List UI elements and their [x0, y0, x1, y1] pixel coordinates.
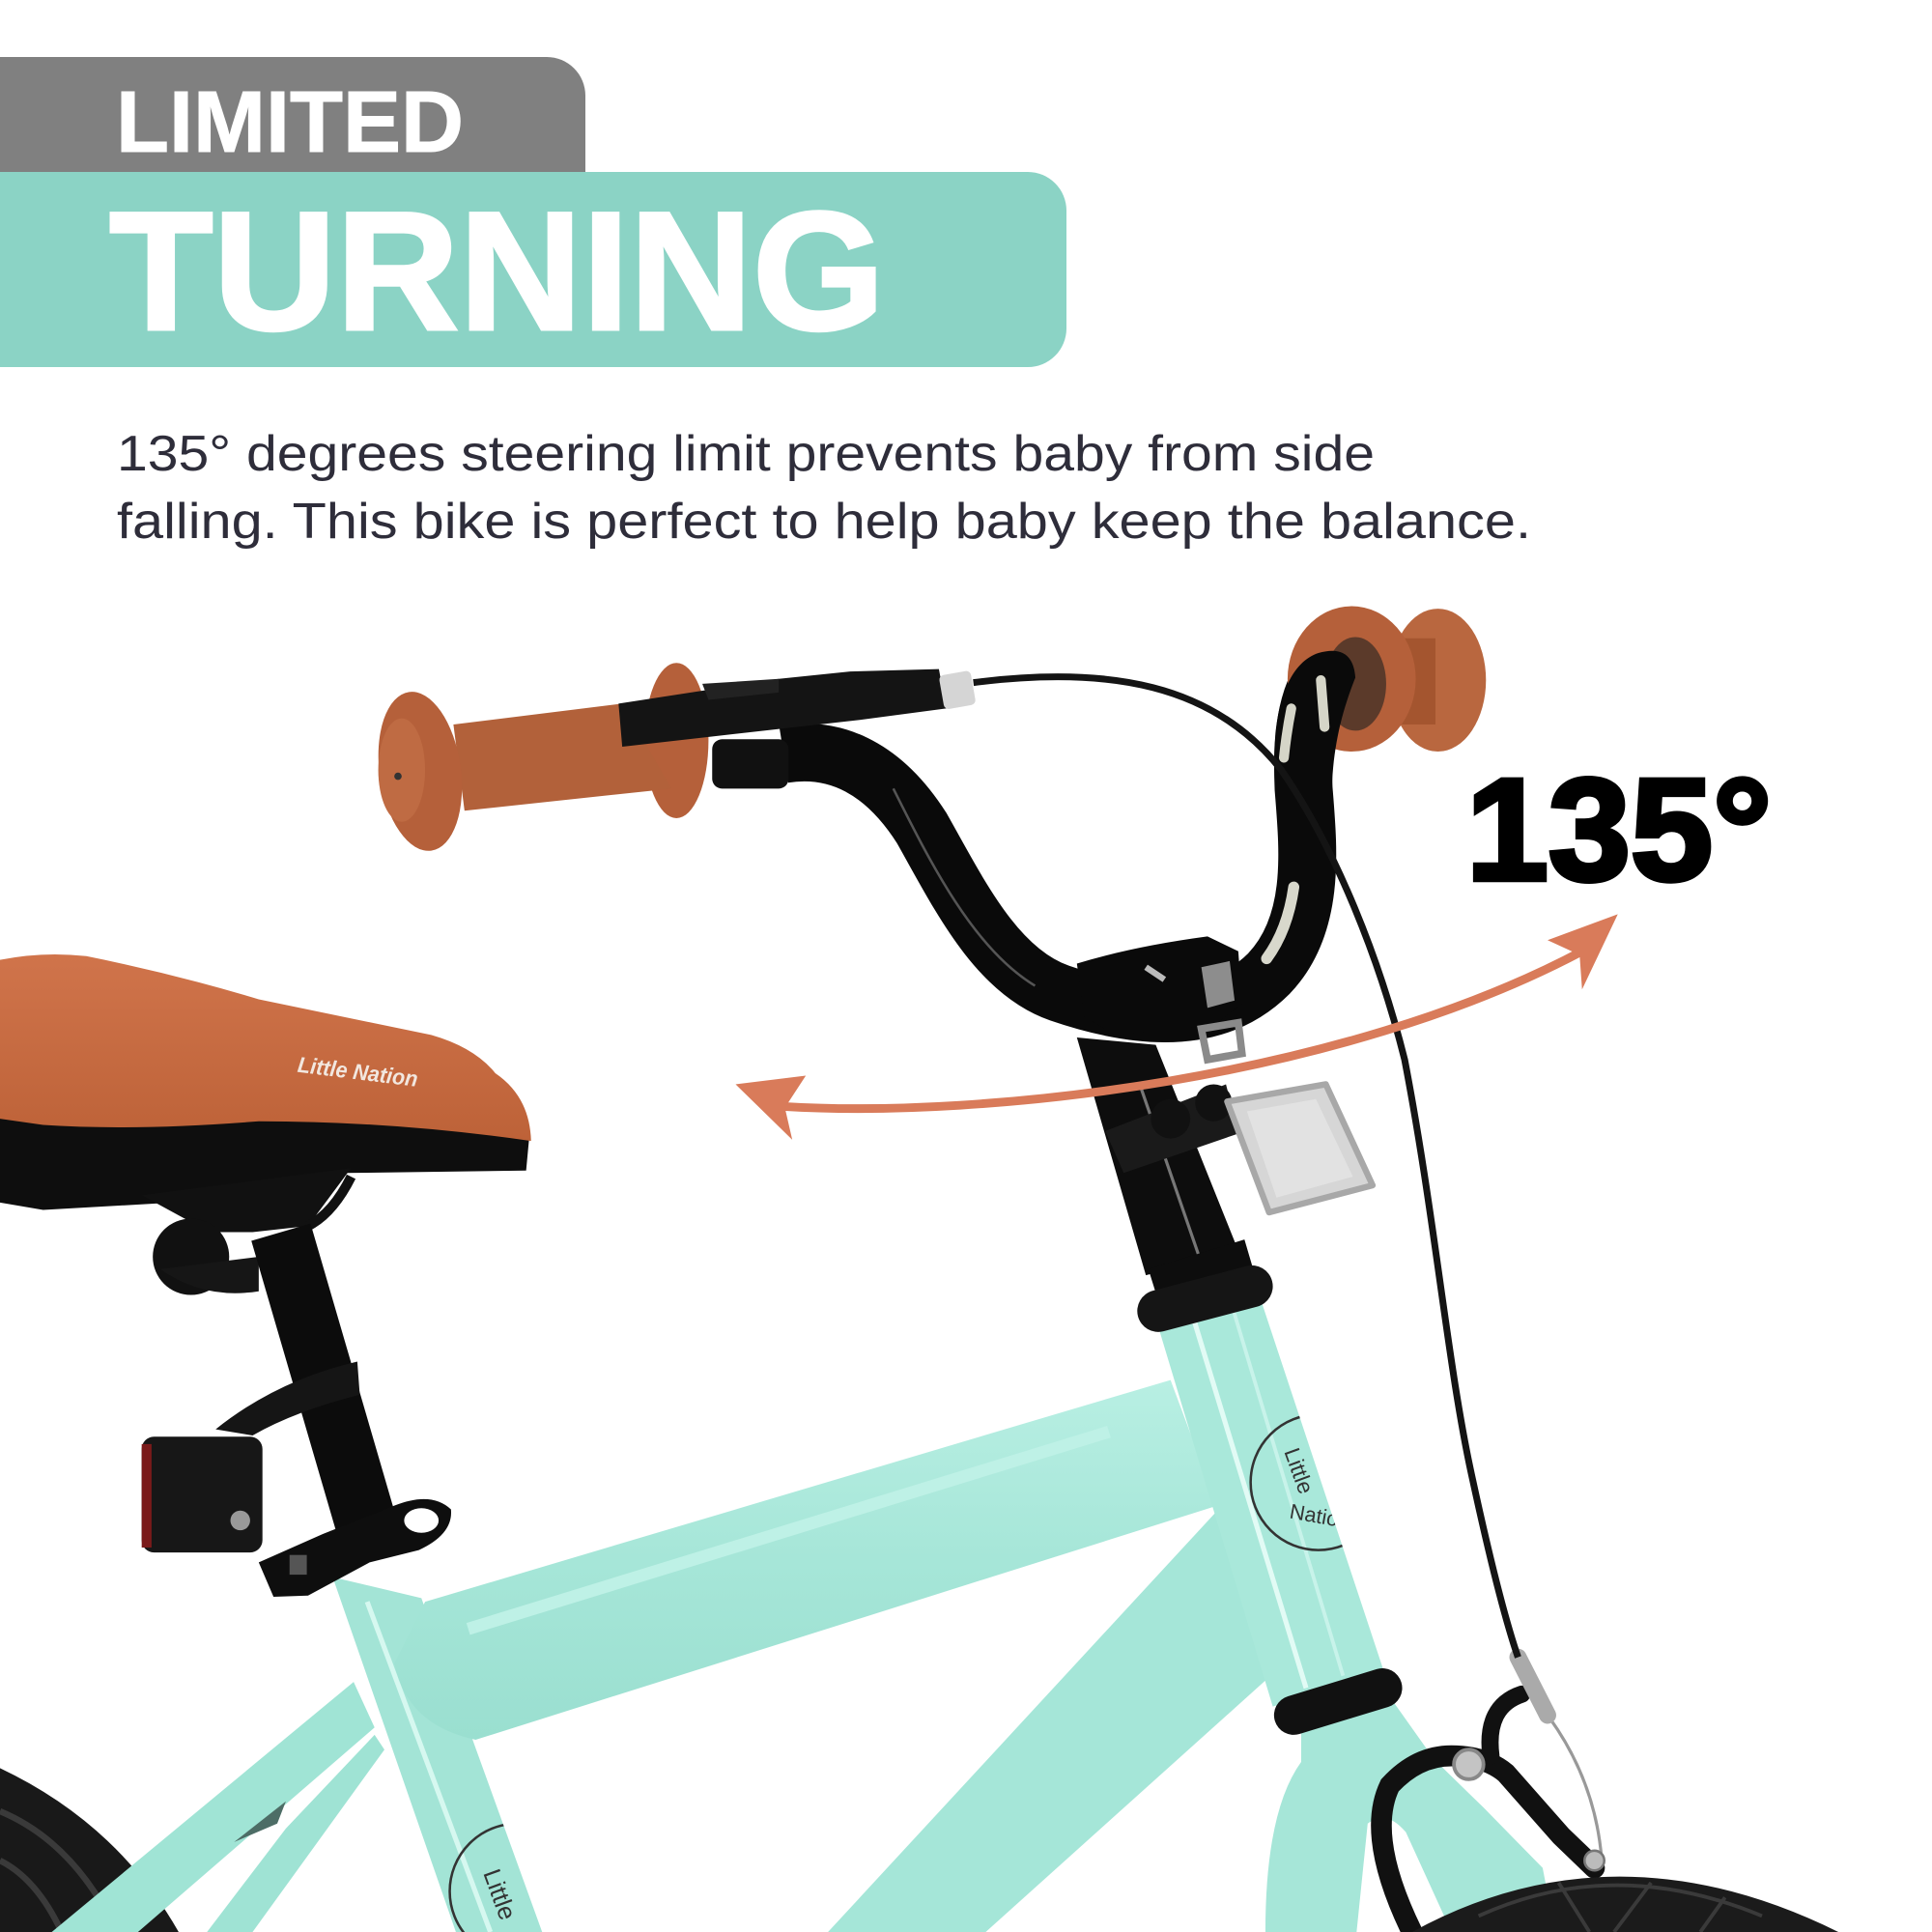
- right grip: [1274, 607, 1486, 788]
- saddle: [0, 954, 531, 1210]
- head tube logo: Nation: [1288, 1499, 1351, 1533]
- saddle rails and clamp: [142, 1168, 352, 1295]
- brake cable: [974, 677, 1518, 1658]
- rotation arrow: [735, 914, 1618, 1140]
- seat tube: [332, 1577, 542, 1932]
- rear tire: [0, 1768, 179, 1932]
- fork: [1265, 1700, 1555, 1932]
- bicycle illustration: [0, 607, 1838, 1932]
- seat post: [281, 1233, 367, 1528]
- seat clamp: [259, 1499, 451, 1597]
- front brake caliper: [1381, 1658, 1605, 1932]
- head tube logo: Little: [1279, 1444, 1319, 1497]
- left grip: [369, 663, 708, 856]
- header tab: LIMITED: [0, 57, 585, 172]
- stem clamp: [1077, 936, 1242, 1060]
- description text: [117, 426, 1531, 550]
- handlebar: [783, 666, 1331, 1013]
- steering stem: [1077, 1037, 1257, 1311]
- head tube logo: [1249, 1416, 1343, 1551]
- front reflector: [1105, 1084, 1373, 1212]
- header banner: TURNING: TURNING: [109, 178, 885, 366]
- header banner: TURNING: [0, 172, 1066, 367]
- head tube: [1155, 1288, 1383, 1707]
- seat tube logo: Little: [477, 1865, 521, 1923]
- header tab: LIMITED: LIMITED: [116, 74, 464, 171]
- saddle: Little Nation: [297, 1052, 419, 1092]
- seat tube logo: [448, 1824, 512, 1932]
- 135 degrees label: 135°: [1466, 749, 1772, 911]
- lower headset ring: [1293, 1688, 1382, 1716]
- brake lever: [618, 669, 977, 788]
- top tube: [394, 1380, 1217, 1740]
- front tire: [1412, 1877, 1838, 1932]
- rear stays: [52, 1682, 384, 1932]
- description text: 135° degrees steering limit prevents baby from side: [117, 426, 1375, 482]
- down tube: [828, 1511, 1279, 1932]
- description text: falling. This bike is perfect to help baby keep the balance.: [117, 494, 1531, 550]
- rear reflector: [142, 1361, 359, 1552]
